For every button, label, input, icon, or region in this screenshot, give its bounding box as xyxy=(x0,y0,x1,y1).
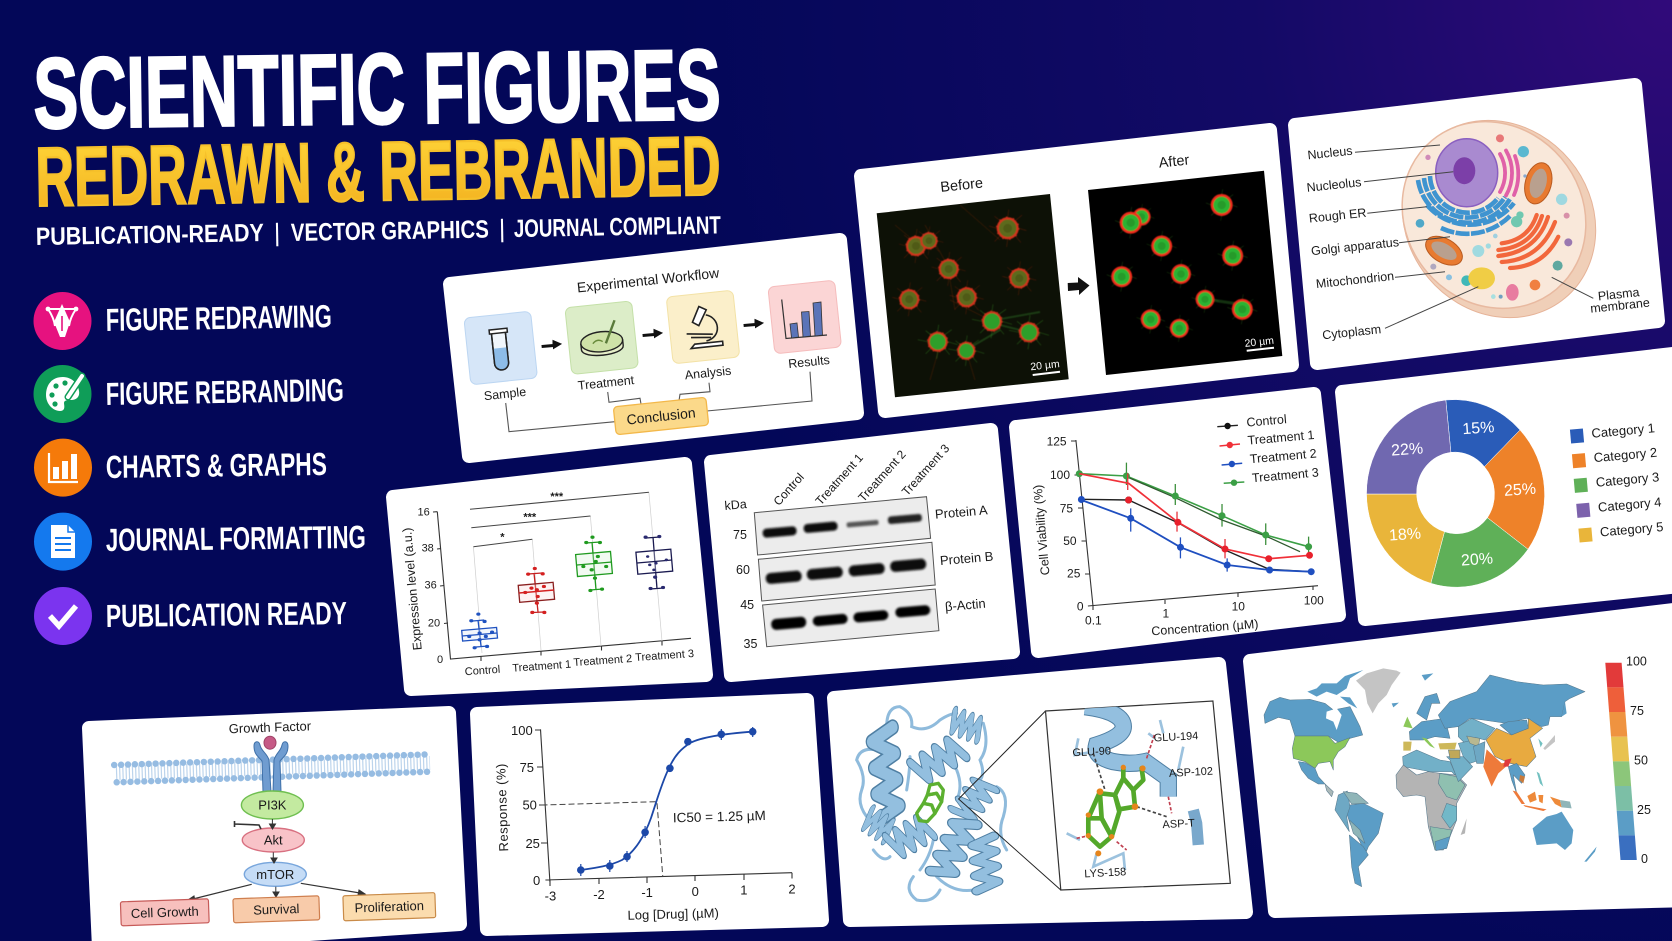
blot: beta actin xyxy=(763,589,986,647)
leader lines xyxy=(1355,145,1593,328)
guide lines xyxy=(473,492,662,653)
residue labels: LYS-158 xyxy=(1084,866,1127,880)
node: mTOR xyxy=(244,862,306,886)
bound ligand xyxy=(917,783,943,822)
y axis labels: 38 xyxy=(422,542,434,554)
residue labels: GLU-194 xyxy=(1153,730,1199,744)
molecular weight labels: 75 xyxy=(733,528,747,542)
label: PUBLICATION READY xyxy=(106,595,347,634)
slice labels: 15% xyxy=(1462,419,1495,438)
y axis labels: Cell Viability (%) xyxy=(1031,484,1053,576)
workflow title: Experimental Workflow xyxy=(576,264,721,295)
series: control xyxy=(1081,496,1311,572)
panel: signalling pathway xyxy=(89,713,460,941)
image: after xyxy=(1088,171,1282,375)
feature: charts and graphs xyxy=(34,439,327,497)
x axis labels: 100 xyxy=(1304,594,1324,608)
growth factor label: Growth Factor xyxy=(228,718,312,736)
significance stars: *** xyxy=(523,512,537,524)
pathway arrows xyxy=(188,819,365,901)
icon: check xyxy=(34,587,92,645)
x axis labels: -1 xyxy=(641,885,653,900)
residue labels: ASP-T xyxy=(1162,817,1195,831)
significance stars: *** xyxy=(550,491,564,503)
x axis labels: 1 xyxy=(1163,606,1170,620)
panel: western blot xyxy=(711,430,1013,675)
y axis labels: 0 xyxy=(533,873,540,888)
zoom lines xyxy=(959,711,1061,890)
residue labels xyxy=(1072,730,1213,880)
panel: experimental workflow xyxy=(450,240,857,456)
molecular weight labels: 45 xyxy=(740,598,754,612)
cell labels: Golgi apparatus xyxy=(1310,235,1400,258)
lipid membrane xyxy=(114,754,430,782)
y axis labels: 36 xyxy=(424,580,437,592)
conclusion box: Conclusion xyxy=(626,404,696,428)
y axis labels xyxy=(400,507,443,666)
axes xyxy=(535,729,792,886)
donut legend: Category 5 xyxy=(1599,519,1664,539)
y axis labels: 16 xyxy=(417,507,430,519)
feature: publication ready xyxy=(34,587,347,645)
icon: pen tool xyxy=(34,292,92,350)
series: treatment 2 xyxy=(1078,496,1315,575)
panel: protein structure xyxy=(834,664,1246,920)
x axis labels: -2 xyxy=(593,887,605,902)
subtitle xyxy=(36,211,721,251)
series: treatment 1 xyxy=(1079,473,1313,562)
step: sample: Sample xyxy=(483,385,527,403)
x axis labels: Control xyxy=(464,664,501,678)
significance stars: * xyxy=(500,531,505,543)
scale labels: 50 xyxy=(1634,754,1648,768)
lane labels xyxy=(771,441,953,508)
y axis labels: 50 xyxy=(1063,534,1077,548)
feature: figure rebranding xyxy=(34,365,344,423)
residue labels: GLU-90 xyxy=(1072,745,1111,759)
x axis labels: 10 xyxy=(1232,600,1245,614)
significance brackets xyxy=(470,492,649,547)
legend: Treatment 1 xyxy=(1247,428,1315,448)
box: proliferation: Proliferation xyxy=(354,898,424,915)
legend: Treatment 2 xyxy=(1249,446,1317,466)
label: JOURNAL FORMATTING xyxy=(106,519,366,558)
heading: after: After xyxy=(1158,152,1190,172)
y axis labels: Expression level (a.u.) xyxy=(400,527,425,651)
feature: figure redrawing xyxy=(34,292,332,350)
arrow xyxy=(1068,277,1090,295)
receptor xyxy=(254,736,288,792)
cell labels: Plasma xyxy=(1597,285,1640,303)
lane labels: Treatment 1 xyxy=(813,451,866,508)
step: analysis xyxy=(666,290,740,382)
cell labels: Rough ER xyxy=(1308,206,1367,226)
image: after: 20 µm xyxy=(1244,335,1275,350)
donut slices xyxy=(1366,400,1545,587)
node: Akt xyxy=(242,828,304,852)
sigmoid curve xyxy=(577,727,756,876)
blot: protein b: Protein B xyxy=(939,549,994,568)
conclusion box xyxy=(613,397,709,435)
icon: bars xyxy=(34,439,92,497)
y axis labels: 0 xyxy=(437,654,443,666)
box: treatment 2 xyxy=(576,536,612,592)
node: PI3K xyxy=(241,791,303,819)
series: treatment 3 xyxy=(1076,463,1312,553)
slice labels: 18% xyxy=(1388,525,1422,545)
step: treatment xyxy=(565,301,639,393)
legend: Treatment 3 xyxy=(1251,465,1319,485)
protein ribbon xyxy=(857,707,1007,901)
slice labels: 20% xyxy=(1460,550,1494,570)
y axis labels: Response (%) xyxy=(493,763,511,852)
donut legend: Category 3 xyxy=(1595,469,1660,490)
legend: Control xyxy=(1246,412,1287,430)
axes xyxy=(433,512,691,661)
y axis labels xyxy=(493,723,540,888)
scale labels: 25 xyxy=(1637,803,1651,817)
step: results: Results xyxy=(788,353,830,371)
panel: donut chart xyxy=(1342,352,1672,619)
lane labels: Control xyxy=(771,470,807,508)
blot: beta actin: β-Actin xyxy=(944,596,986,614)
cell labels xyxy=(1306,144,1650,342)
title: redrawn and rebranded: REDRAWN & REBRANDED xyxy=(35,119,721,224)
cell labels: membrane xyxy=(1590,296,1650,316)
panel: world map xyxy=(1250,608,1672,911)
x axis labels: Treatment 3 xyxy=(635,648,694,664)
subtitle: | xyxy=(499,215,506,243)
y axis labels: 50 xyxy=(522,798,537,812)
y axis labels: 100 xyxy=(511,723,533,738)
IC50 guide lines xyxy=(542,802,663,877)
colour scale xyxy=(1605,663,1637,860)
box: treatment 1 xyxy=(518,567,555,614)
x axis labels: Treatment 1 xyxy=(512,659,572,675)
y axis labels: 75 xyxy=(1060,501,1073,515)
node: Akt: Akt xyxy=(264,832,283,848)
legend xyxy=(1217,412,1319,486)
scale labels: 75 xyxy=(1630,704,1644,718)
arrow xyxy=(744,320,763,328)
x axis labels: 0 xyxy=(692,884,699,899)
donut legend: Category 4 xyxy=(1597,494,1662,515)
blot: protein b xyxy=(758,542,994,601)
step: results xyxy=(768,280,842,371)
feature: journal formatting xyxy=(34,513,366,571)
x axis labels: 0.1 xyxy=(1085,614,1102,628)
y axis labels xyxy=(1031,435,1084,614)
label: FIGURE REDRAWING xyxy=(105,298,332,338)
box: survival xyxy=(233,896,320,923)
cell illustration xyxy=(1362,81,1636,357)
significance stars xyxy=(500,491,564,543)
heading: before: Before xyxy=(940,176,984,196)
subtitle: | xyxy=(274,219,281,247)
molecular weight labels: 60 xyxy=(736,563,750,577)
x axis labels: -3 xyxy=(545,888,556,904)
box: treatment 3 xyxy=(636,535,673,590)
arrow xyxy=(643,330,662,338)
subtitle: VECTOR GRAPHICS xyxy=(291,216,489,247)
cell labels: Cytoplasm xyxy=(1322,322,1382,342)
inset frame xyxy=(1046,701,1230,890)
y axis labels: 0 xyxy=(1077,600,1084,614)
residue labels: ASP-102 xyxy=(1169,766,1213,780)
donut legend: Category 2 xyxy=(1593,445,1658,465)
panel: before and after microscopy xyxy=(861,130,1292,411)
scale labels: 100 xyxy=(1626,655,1647,669)
slice labels: 25% xyxy=(1503,481,1537,500)
step: treatment: Treatment xyxy=(577,373,635,393)
panel: dose response curve xyxy=(477,700,822,929)
blot: protein a: Protein A xyxy=(934,502,989,522)
node: mTOR: mTOR xyxy=(256,867,294,882)
x axis labels: 1 xyxy=(740,882,748,898)
x axis labels: Treatment 2 xyxy=(573,653,633,669)
y axis labels: 25 xyxy=(1067,566,1081,580)
image: before: 20 µm xyxy=(1030,358,1060,373)
box: proliferation xyxy=(343,893,436,921)
cell labels: Nucleolus xyxy=(1306,175,1362,195)
x axis labels xyxy=(464,648,694,678)
label: CHARTS & GRAPHS xyxy=(106,446,327,485)
blot: protein a xyxy=(754,497,989,555)
lane labels: Treatment 3 xyxy=(899,441,953,499)
lane labels: Treatment 2 xyxy=(855,447,909,505)
map xyxy=(1264,668,1597,887)
slice labels xyxy=(1388,419,1537,570)
box: cell growth: Cell Growth xyxy=(131,904,199,921)
panel: animal cell diagram xyxy=(1295,81,1658,363)
image: before xyxy=(877,194,1069,397)
box: survival: Survival xyxy=(253,901,300,918)
y axis labels: 25 xyxy=(525,836,540,851)
box: cell growth xyxy=(120,899,209,926)
connectors xyxy=(506,372,812,432)
step: sample xyxy=(464,311,538,403)
arrow xyxy=(542,340,561,348)
x axis labels: 2 xyxy=(788,882,796,896)
node: PI3K: PI3K xyxy=(258,798,287,812)
scale labels xyxy=(1626,655,1651,866)
IC50 label: IC50 = 1.25 µM xyxy=(673,808,766,825)
box: control xyxy=(462,612,497,649)
panel: box plot xyxy=(393,464,706,689)
x axis labels xyxy=(545,882,796,923)
y axis labels: 125 xyxy=(1047,435,1067,449)
axes xyxy=(1071,440,1318,610)
y axis labels: 75 xyxy=(520,760,534,775)
panel: cell viability line chart xyxy=(1016,394,1339,651)
title: scientific figures: SCIENTIFIC FIGURES xyxy=(33,29,721,150)
label: FIGURE REBRANDING xyxy=(105,372,344,412)
scale labels: 0 xyxy=(1641,852,1648,866)
molecular weight labels: 35 xyxy=(744,637,757,651)
icon: document xyxy=(34,513,92,571)
x axis labels: Concentration (µM) xyxy=(1151,617,1259,638)
x axis labels xyxy=(1085,594,1324,638)
donut legend: Category 1 xyxy=(1591,420,1656,441)
molecular weight labels xyxy=(724,497,757,651)
step: analysis: Analysis xyxy=(684,364,732,382)
donut legend xyxy=(1570,420,1664,543)
slice labels: 22% xyxy=(1391,440,1424,460)
x axis labels: Log [Drug] (µM) xyxy=(627,905,719,923)
y axis labels: 20 xyxy=(428,617,440,629)
subtitle: JOURNAL COMPLIANT xyxy=(514,211,721,243)
subtitle: PUBLICATION-READY xyxy=(36,219,264,251)
icon: palette xyxy=(34,365,92,423)
cell labels: Mitochondrion xyxy=(1315,269,1395,291)
y axis labels: 100 xyxy=(1050,468,1070,482)
cell labels: Nucleus xyxy=(1307,144,1353,162)
molecular weight labels: kDa xyxy=(724,497,747,513)
